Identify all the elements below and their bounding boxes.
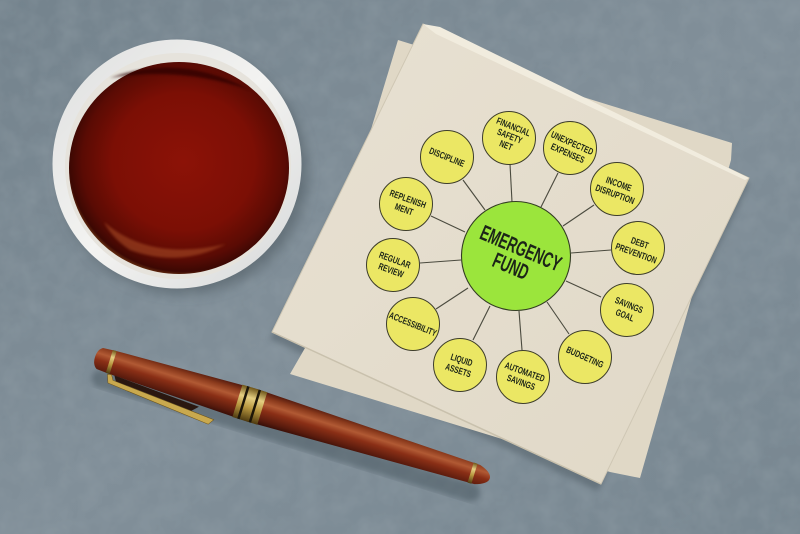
bubble: savings goal: GOAL: [614, 307, 636, 324]
gold ring left: [106, 350, 117, 374]
bubble: unexpected expenses: UNEXPECTED: [549, 129, 595, 157]
bubble: debt prevention: PREVENTION: [614, 241, 658, 266]
bubble: liquid assets: LIQUID: [449, 352, 474, 369]
bubble: financial safety net: FINANCIAL: [495, 116, 532, 139]
bubble: income disruption: DISRUPTION: [594, 183, 636, 206]
pen clip: [102, 373, 218, 425]
bubble: debt prevention: [612, 222, 664, 274]
bubble: debt prevention: DEBT: [629, 235, 650, 251]
bubble: replenishment: REPLENISH: [388, 188, 427, 211]
bubble: savings goal: [600, 284, 654, 336]
bubble: replenishment: MENT: [393, 201, 415, 218]
bubble: financial safety net: NET: [498, 138, 514, 153]
bubble: budgeting: [558, 330, 612, 384]
bubble: income disruption: INCOME: [605, 175, 633, 194]
bubble: savings goal: SAVINGS: [613, 295, 645, 316]
bubble diagram: emergency fund: [366, 112, 664, 404]
bubble: liquid assets: ASSETS: [444, 362, 473, 380]
gold ring right: [468, 463, 478, 484]
tea bowl: [52, 40, 308, 294]
bubble: liquid assets: [434, 338, 486, 392]
back napkin: [290, 40, 732, 478]
centre circle: EMERGENCY: [477, 221, 565, 276]
bubble: income disruption: [590, 162, 644, 216]
bubble: financial safety net: [482, 112, 536, 164]
fountain pen: [86, 341, 495, 508]
connector lines: [420, 164, 611, 350]
napkin stack: [270, 24, 750, 491]
bubble: replenishment: [380, 178, 432, 230]
bubble: regular review: [366, 238, 420, 292]
bubble: unexpected expenses: EXPENSES: [549, 141, 586, 166]
bubble: budgeting: BUDGETING: [565, 345, 605, 370]
bubble: accessibility: [386, 298, 440, 350]
centre circle: FUND: [489, 248, 533, 285]
bubble: unexpected expenses: [544, 122, 596, 174]
bubble: regular review: REGULAR: [378, 250, 412, 271]
bubble: financial safety net: SAFETY: [496, 127, 524, 146]
bubble: discipline: [420, 130, 474, 184]
tea surface: [69, 62, 289, 274]
bubble: automated savings: AUTOMATED: [503, 360, 546, 384]
bubble: accessibility: ACCESSIBILITY: [388, 310, 439, 339]
bubble: discipline: DISCIPLINE: [428, 146, 466, 169]
centre circle: [462, 202, 570, 310]
front napkin: [272, 24, 749, 484]
bubble: regular review: REVIEW: [377, 261, 405, 280]
bubble: automated savings: [496, 350, 550, 404]
pen body: [90, 341, 495, 495]
bubble: automated savings: SAVINGS: [505, 373, 537, 393]
gold centre band: [232, 385, 267, 425]
